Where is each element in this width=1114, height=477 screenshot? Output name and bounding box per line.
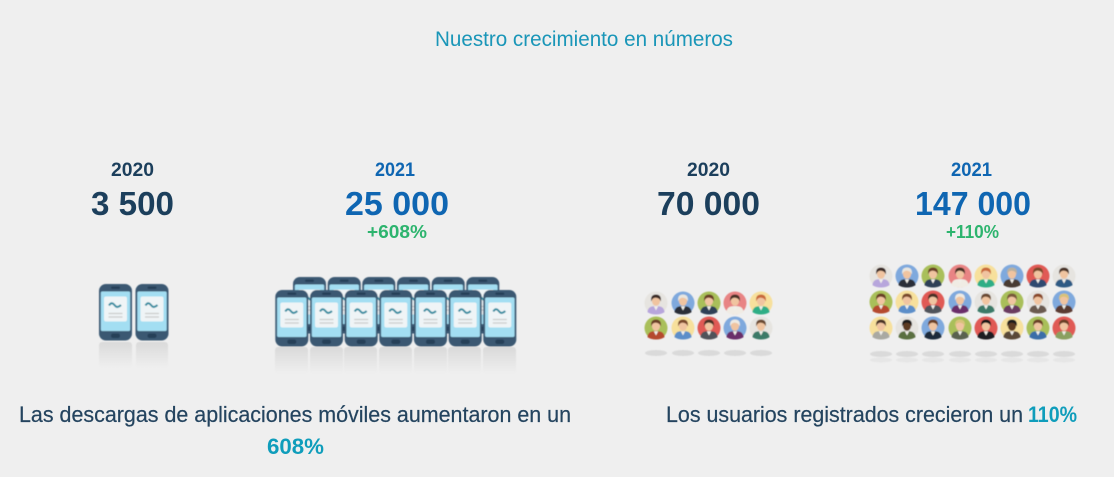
text: downloads summary: 608% bbox=[267, 434, 324, 459]
stat: users 2021: 2021 bbox=[951, 160, 992, 181]
stat: downloads 2020: 2020 bbox=[111, 160, 154, 181]
text: downloads summary: Las descargas de aplicaciones móviles aumentaron en un bbox=[19, 402, 571, 427]
stat: users 2020 bbox=[657, 160, 760, 222]
stat: downloads 2020: 3 500 bbox=[91, 185, 174, 222]
panel: registered users bbox=[644, 160, 1077, 427]
stat: users 2020: 2020 bbox=[687, 160, 730, 181]
stat: users 2020: 70 000 bbox=[657, 185, 760, 222]
icon: users group 2021 bbox=[870, 264, 1076, 362]
stat: users 2021: +110% bbox=[946, 222, 999, 242]
stat: downloads 2021 bbox=[345, 160, 449, 242]
stat: users 2021 bbox=[915, 160, 1031, 242]
stat: downloads 2020 bbox=[91, 160, 174, 222]
icon: users group 2020 bbox=[644, 292, 772, 356]
panel: app downloads bbox=[19, 160, 571, 459]
text: users summary: Los usuarios registrados crecieron un bbox=[666, 402, 1023, 427]
icon: two phones 2020 bbox=[99, 284, 168, 368]
stat: downloads 2021: 2021 bbox=[375, 160, 415, 181]
title: Nuestro crecimiento en números bbox=[435, 28, 733, 51]
stat: downloads 2021: 25 000 bbox=[345, 185, 449, 222]
icon: phones 2021 bbox=[275, 277, 516, 374]
text: downloads summary bbox=[19, 402, 571, 459]
stat: downloads 2021: +608% bbox=[367, 222, 427, 242]
text: users summary: 110% bbox=[1028, 402, 1077, 427]
stat: users 2021: 147 000 bbox=[915, 185, 1031, 222]
